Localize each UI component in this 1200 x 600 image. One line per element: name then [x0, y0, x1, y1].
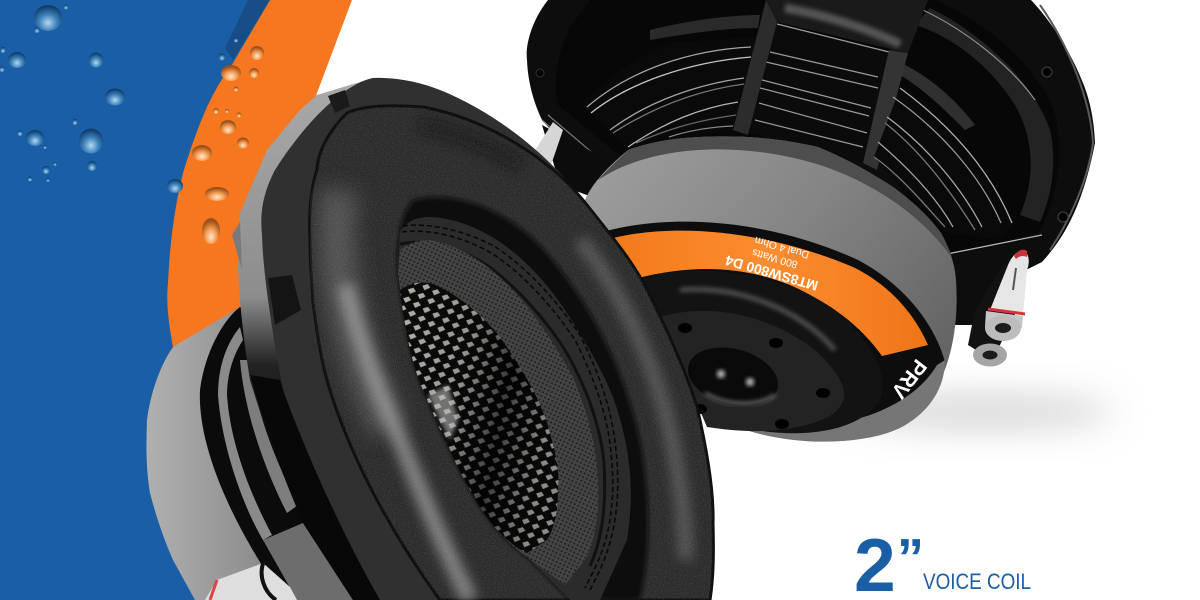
rear orange label band — [613, 231, 928, 356]
voice coil caption: VOICE COIL — [923, 569, 1031, 594]
front magnet housing — [146, 307, 320, 600]
front black rings — [200, 307, 400, 600]
rear lower grey rim — [680, 360, 945, 441]
rear flange — [945, 235, 1045, 325]
foam grain — [310, 106, 713, 600]
front speaker — [146, 78, 713, 600]
cone mesh ring — [398, 240, 598, 585]
floor shadow — [855, 396, 1115, 428]
frame notch — [232, 222, 242, 270]
front terminal — [205, 561, 297, 600]
blue wave panel — [0, 0, 300, 600]
foam highlights — [337, 125, 686, 600]
cone well — [397, 197, 648, 600]
carbon fibre dust cap — [400, 283, 558, 553]
water droplets on orange — [192, 46, 264, 244]
front foam gasket — [261, 78, 713, 600]
rear speaker — [527, 0, 1095, 442]
rear label watts text: 800 Watts — [751, 246, 799, 270]
rear basket interior — [556, 0, 1059, 255]
stitch lines — [400, 225, 618, 590]
right fins — [874, 88, 1012, 240]
rear black ring — [606, 222, 945, 434]
left fins — [542, 37, 759, 185]
centre fin panel — [733, 0, 908, 170]
water droplets on blue — [0, 4, 238, 193]
rear magnet housing — [565, 136, 957, 442]
front inner grey strip — [218, 327, 272, 540]
rim highlight — [1040, 5, 1093, 250]
orange wave band — [167, 0, 352, 347]
rear brand mark: PRV — [887, 355, 931, 403]
front bracket — [263, 523, 353, 600]
rear terminal right — [968, 250, 1029, 366]
gasket tabs — [268, 90, 350, 325]
white upper right background cut — [300, 0, 600, 200]
rear basket rim — [527, 0, 1095, 310]
rim mounting holes — [536, 67, 1068, 222]
front foam surround roll — [310, 106, 713, 600]
centre spoke top bar — [766, 0, 928, 53]
front spider strip — [240, 360, 298, 513]
dark blue stripe — [225, 0, 270, 60]
rear label ohm text: Dual 4 Ohm — [753, 234, 811, 261]
rear magnet dark top strip — [598, 136, 952, 258]
frame lower black gloss — [250, 375, 380, 600]
rear gasket foam — [650, 8, 1053, 222]
front frame — [238, 78, 710, 600]
left lower spoke — [542, 125, 617, 200]
inch mark: ” — [897, 528, 924, 588]
rear back plate — [640, 271, 883, 433]
stitched band — [398, 217, 631, 600]
rear terminal left — [534, 122, 563, 168]
voice coil callout — [854, 523, 1031, 600]
spoke gloss — [785, 8, 900, 44]
rear label model text: MT8SW800 D4 — [723, 252, 820, 294]
